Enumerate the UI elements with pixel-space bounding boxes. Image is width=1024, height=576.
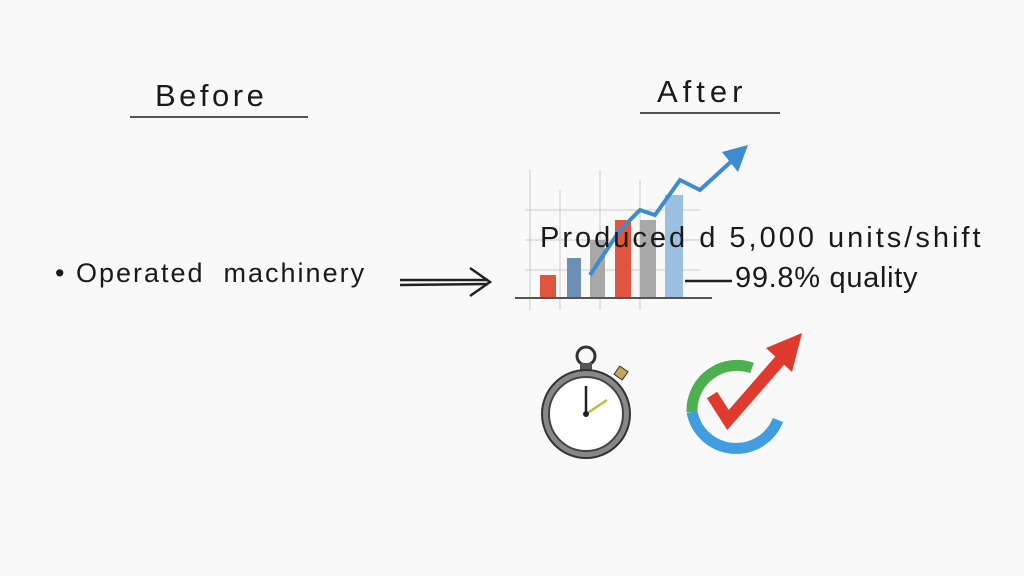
arrow: before to after bbox=[400, 268, 490, 296]
bar chart bbox=[515, 145, 748, 310]
icon: check with arrow bbox=[692, 333, 802, 448]
connector line bbox=[685, 280, 732, 282]
heading: After: After bbox=[657, 74, 747, 109]
heading: Before: Before bbox=[155, 78, 267, 113]
text: quality: 99.8% quality bbox=[735, 262, 918, 294]
bullet text: Operated machinery: • Operated machinery bbox=[55, 258, 366, 288]
icon: stopwatch bbox=[542, 347, 630, 458]
text: production: Produced d 5,000 units/shift bbox=[540, 222, 984, 254]
